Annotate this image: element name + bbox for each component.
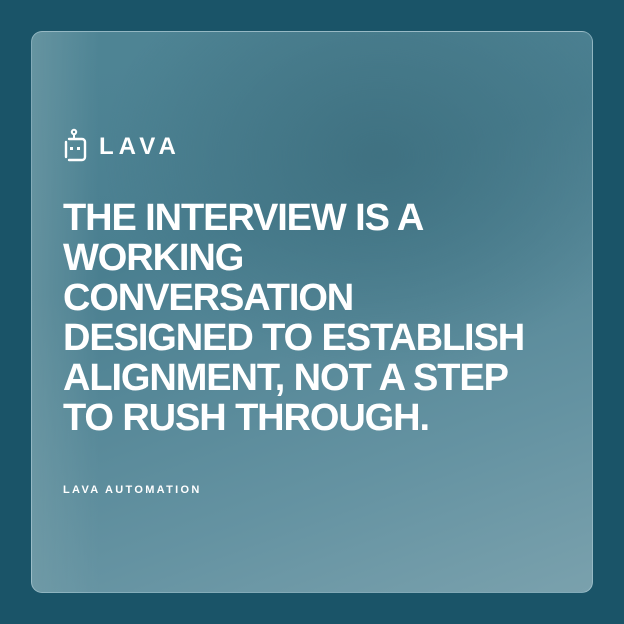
heading: THE INTERVIEW IS A <box>63 197 423 239</box>
heading: CONVERSATION <box>63 277 353 319</box>
brand name: LAVA <box>99 133 181 160</box>
heading <box>63 197 524 439</box>
heading: DESIGNED TO ESTABLISH <box>63 317 524 359</box>
icon: robot <box>64 128 86 162</box>
heading: WORKING <box>63 237 243 279</box>
heading: TO RUSH THROUGH. <box>63 397 429 439</box>
footer text: LAVA AUTOMATION <box>63 484 202 496</box>
heading: ALIGNMENT, NOT A STEP <box>63 357 508 399</box>
logo <box>64 128 181 162</box>
